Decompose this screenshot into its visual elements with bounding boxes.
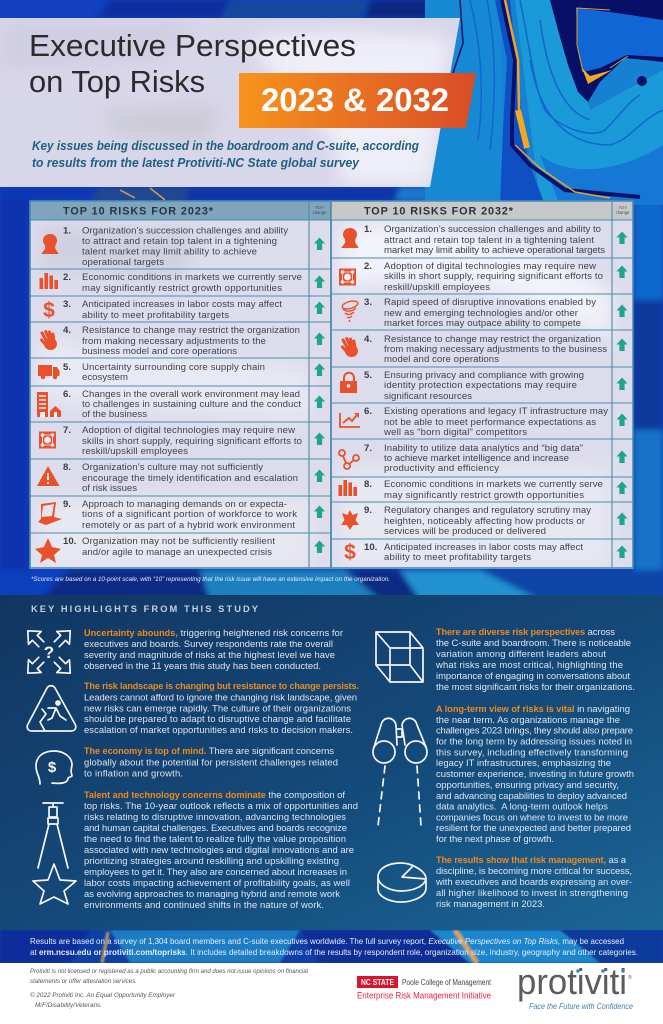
text: diverse perspectives bbox=[435, 627, 635, 693]
text: diverse perspectives: variation among different leaders about bbox=[436, 649, 606, 660]
text: long-term view: companies focus on where to invest to be more bbox=[436, 812, 628, 824]
risk 6: to challenges in sustaining culture and the conduct bbox=[82, 399, 301, 410]
highlight: economy bbox=[36, 746, 338, 784]
risk 10: 10. bbox=[63, 536, 76, 547]
risk 6 bbox=[340, 406, 628, 438]
heading: top 10 risks 2032: YOY bbox=[618, 205, 628, 210]
risk 2: 2. bbox=[364, 261, 372, 272]
icon: spotlight and star bbox=[33, 803, 76, 904]
risk 10: $ bbox=[344, 541, 356, 564]
text: talent and technology: prioritizing strategies around reskilling and upskilling existing bbox=[84, 856, 339, 867]
legal disclaimer: M/F/Disability/Veterans. bbox=[35, 1002, 102, 1009]
title panel bbox=[0, 18, 476, 187]
risk 4: 4. bbox=[63, 325, 71, 336]
risk 2: Economic conditions in markets we currently serve bbox=[82, 272, 302, 283]
panel: top 10 risks for 2023 bbox=[30, 201, 331, 568]
risk 1 bbox=[42, 226, 325, 268]
text: long-term view: for the next phase of growth. bbox=[436, 834, 554, 845]
text: economy: The economy is top of mind. There are significant concerns bbox=[84, 746, 334, 757]
risk 6: 6. bbox=[63, 389, 71, 400]
text: long-term view: data analytics. A long-term outlook helps bbox=[436, 802, 608, 812]
text: talent and technology: Talent and technology concerns dominate the composition of bbox=[84, 790, 345, 801]
risk 6: of the business bbox=[82, 409, 147, 420]
risk 2 bbox=[339, 261, 628, 293]
risk 9 bbox=[38, 499, 325, 531]
risk 2: may significantly restrict growth opportunities bbox=[82, 283, 282, 294]
footer bbox=[0, 961, 663, 1024]
icon: head with dollar bbox=[36, 751, 72, 784]
text: risk management bbox=[435, 855, 632, 910]
highlight: diverse perspectives bbox=[376, 627, 635, 693]
text: risk management: with executives and boards expressing an over- bbox=[435, 877, 632, 888]
risk 9: remotely or as part of a hybrid work environment bbox=[82, 520, 295, 531]
risk 6: 6. bbox=[364, 406, 372, 417]
risk 2: 2. bbox=[63, 272, 71, 283]
logo: protiviti: protiviti bbox=[517, 961, 627, 1002]
risk 4: from making necessary adjustments to the business bbox=[384, 344, 607, 355]
risk 1: Organization’s succession challenges and ability bbox=[82, 226, 288, 236]
marbled background: upper section bbox=[0, 0, 663, 600]
text: talent and technology: top risks. The 10-year outlook reflects a mix of opportunities and bbox=[84, 801, 358, 812]
text: diverse perspectives: There are diverse risk perspectives across bbox=[436, 627, 615, 638]
risk 2: skills in short supply, requiring significant efforts to bbox=[384, 271, 603, 282]
icon: wireframe cube bbox=[376, 632, 423, 682]
risk 5 bbox=[340, 370, 628, 402]
risk 8: 8. bbox=[63, 462, 71, 473]
heading: top 10 risks 2032 bbox=[331, 201, 633, 220]
risk 4: 4. bbox=[364, 334, 372, 345]
year badge bbox=[239, 73, 476, 128]
footnote: *Scores are based on a 10-point scale, with “10” representing that the risk issue will have an extensive impact on the organization. bbox=[31, 576, 390, 583]
text: economy bbox=[84, 746, 338, 780]
logo: NC State bbox=[357, 976, 492, 1000]
legal disclaimer: © 2022 Protiviti Inc. An Equal Opportunity Employer bbox=[30, 991, 176, 999]
icon: arrows and question mark: ? bbox=[44, 643, 54, 662]
logo: NC State: Poole College of Management bbox=[402, 978, 492, 987]
risk 6 bbox=[37, 389, 325, 420]
risk 2 bbox=[40, 272, 325, 294]
text: risk landscape: The risk landscape is changing but resistance to change persists. bbox=[84, 681, 359, 691]
legal disclaimer: statements or offer attestation services. bbox=[30, 978, 137, 985]
risk 4: Resistance to change may restrict the organization bbox=[384, 334, 601, 345]
icon: falling figure triangle bbox=[27, 686, 76, 731]
risk 1: 1. bbox=[364, 224, 372, 235]
risk 10 bbox=[344, 541, 628, 564]
risk 6: not be able to meet performance expectations as bbox=[384, 417, 596, 428]
risk 7: 7. bbox=[63, 425, 71, 436]
risk 6: well as “born digital” competitors bbox=[383, 427, 527, 438]
risk 5: significant resources bbox=[384, 391, 472, 402]
text: talent and technology: labor costs impacting achievement of profitability goals, as well bbox=[84, 878, 350, 889]
heading: top 10 risks 2023: YOY bbox=[315, 205, 325, 210]
title bbox=[29, 28, 356, 99]
text: risk landscape: escalation of market opportunities and risks to decision makers. bbox=[84, 725, 353, 736]
risk 1: market may limit ability to achieve operational targets bbox=[384, 245, 605, 256]
year badge: 2023 & 2032 bbox=[261, 82, 449, 118]
risk 7 bbox=[39, 425, 325, 457]
logo: NC State: NC STATE bbox=[361, 978, 395, 987]
risk 5 bbox=[38, 362, 325, 383]
risk 7: to achieve market intelligence and increase bbox=[384, 453, 569, 464]
text: risk landscape bbox=[84, 681, 359, 736]
panel: key highlights bbox=[0, 595, 663, 930]
risk 1: operational targets bbox=[82, 257, 164, 268]
risk 5: 5. bbox=[63, 362, 71, 373]
risk 7: Adoption of digital technologies may require new bbox=[82, 425, 295, 436]
risk 9: 9. bbox=[63, 499, 71, 510]
risk 8: Organization’s culture may not sufficiently bbox=[82, 462, 263, 473]
risk 3: Rapid speed of disruptive innovations enabled by bbox=[384, 297, 596, 308]
text: talent and technology: as evolving approaches to managing hybrid and remote work bbox=[84, 889, 340, 900]
risk 3: ability to meet profitability targets bbox=[82, 310, 229, 321]
logo: NC State: Enterprise Risk Management Initiative bbox=[357, 990, 491, 1000]
risk 9 bbox=[341, 505, 628, 537]
risk 9: heighten, noticeably affecting how products or bbox=[384, 516, 586, 527]
subtitle bbox=[32, 138, 419, 170]
title: Executive Perspectives bbox=[29, 28, 356, 63]
risk 7: productivity and efficiency bbox=[384, 463, 499, 474]
risk 4: model and core operations bbox=[384, 354, 499, 365]
text: uncertainty: severity and magnitude of risks at the highest level we have bbox=[84, 650, 335, 661]
text: long-term view: and advancing capabilities to deploy advanced bbox=[436, 791, 627, 802]
risk 5: Uncertainty surrounding core supply chain bbox=[82, 362, 265, 373]
risk 3 bbox=[43, 299, 325, 322]
text: talent and technology: employees to get it. They also are concerned about increases in bbox=[84, 867, 347, 878]
text: risk landscape: should be prepared to adapt to disruptive change and facilitate bbox=[84, 714, 351, 725]
icon: head with dollar: $ bbox=[48, 759, 57, 776]
risk 7: Inability to utilize data analytics and “big data” bbox=[384, 443, 583, 454]
risk 5: Ensuring privacy and compliance with growing bbox=[384, 370, 584, 381]
subtitle: Key issues being discussed in the boardroom and C-suite, according bbox=[32, 138, 419, 153]
risk 9: 9. bbox=[364, 505, 372, 516]
title: on Top Risks bbox=[29, 64, 205, 99]
heading: top 10 risks 2023 bbox=[30, 201, 331, 220]
text: risk management: all higher likelihood to invest in strengthening bbox=[436, 888, 628, 899]
highlight: talent and technology bbox=[33, 790, 358, 911]
heading: top 10 risks 2032: TOP 10 RISKS FOR 2032* bbox=[364, 206, 514, 218]
risk 7: 7. bbox=[364, 443, 372, 454]
highlight: uncertainty bbox=[21, 624, 343, 680]
risk 7: skills in short supply, requiring significant efforts to bbox=[82, 436, 302, 447]
risk 8 bbox=[338, 479, 628, 501]
legal disclaimer bbox=[30, 968, 309, 1009]
text: uncertainty: executives and boards. Survey respondents rate the overall bbox=[84, 639, 333, 650]
heading: top 10 risks 2023: change bbox=[313, 210, 327, 215]
risk 10 bbox=[35, 536, 325, 563]
risk 10: Organization may not be sufficiently resilient bbox=[82, 536, 275, 547]
section heading: KEY HIGHLIGHTS FROM THIS STUDY bbox=[31, 604, 259, 614]
logo: protiviti: Face the Future with Confidence bbox=[529, 1002, 634, 1011]
risk 8: 8. bbox=[364, 479, 372, 490]
risk 6: Changes in the overall work environment may lead bbox=[82, 389, 300, 400]
risk 9: services will be produced or delivered bbox=[384, 526, 546, 537]
highlight: risk landscape bbox=[27, 681, 359, 736]
logo: protiviti: ® bbox=[628, 974, 632, 981]
risk 8 bbox=[37, 462, 325, 494]
text: long-term view: legacy IT infrastructures, emphasizing the bbox=[436, 758, 611, 769]
text: uncertainty: Uncertainty abounds, triggering heightened risk concerns for bbox=[84, 628, 343, 639]
highlight: long-term view bbox=[373, 704, 634, 845]
risk 10: 10. bbox=[364, 542, 377, 553]
text: talent and technology: and human capital challenges. Executives and boards recognize bbox=[84, 823, 347, 834]
risk 3: 3. bbox=[364, 297, 372, 308]
risk 3: $ bbox=[43, 299, 55, 322]
subtitle: to results from the latest Protiviti-NC State global survey bbox=[32, 155, 360, 170]
risk 9: Regulatory changes and regulatory scrutiny may bbox=[384, 505, 591, 516]
risk 2: Adoption of digital technologies may require new bbox=[384, 261, 596, 272]
risk 4: from making necessary adjustments to the bbox=[82, 336, 266, 347]
icon: arrows and question mark bbox=[21, 624, 77, 680]
text: economy: to inflation and growth. bbox=[84, 768, 183, 780]
risk 10: ability to meet profitability targets bbox=[384, 552, 531, 563]
text: diverse perspectives: the most significant risks for their organizations. bbox=[436, 682, 635, 693]
heading: top 10 risks 2023: TOP 10 RISKS FOR 2023* bbox=[63, 206, 214, 218]
text: risk management: risk management in 2023. bbox=[436, 899, 545, 910]
text: long-term view: customer experience, investing in future growth bbox=[436, 769, 634, 780]
text: risk management: discipline, is becoming more critical for success, bbox=[436, 866, 632, 877]
risk 8: of risk issues bbox=[82, 483, 137, 494]
survey note strip bbox=[0, 930, 663, 963]
risk 9: tions of a significant portion of workforce to work bbox=[82, 509, 297, 520]
icon: pie chart bbox=[378, 863, 426, 902]
text: risk management: The results show that risk management, as a bbox=[436, 855, 627, 866]
risk 5: 5. bbox=[364, 370, 372, 381]
risk 5: ecosystem bbox=[82, 372, 128, 383]
risk 3 bbox=[341, 297, 628, 329]
text: economy: globally about the potential for persistent challenges related bbox=[84, 758, 338, 768]
risk 1 bbox=[342, 224, 628, 256]
text: diverse perspectives: the C-suite and boardroom. There is noticeable bbox=[436, 638, 631, 649]
risk 4: Resistance to change may restrict the organization bbox=[82, 325, 300, 336]
risk 3: Anticipated increases in labor costs may affect bbox=[82, 299, 282, 310]
risk 1: talent market may limit ability to achieve bbox=[82, 246, 257, 258]
survey note strip: at erm.ncsu.edu or protiviti.com/toprisks. It includes detailed breakdowns of the results by respondent role, organization size, industry, geography and other categories. bbox=[30, 947, 638, 957]
text: long-term view: for the long term by addressing issues noted in bbox=[436, 736, 632, 748]
text: diverse perspectives: importance of engaging in conversations about bbox=[436, 671, 630, 682]
text: long-term view bbox=[436, 704, 634, 845]
risk 1: Organization’s succession challenges and ability to bbox=[384, 224, 601, 235]
text: risk landscape: new risks can emerge rapidly. The culture of their organizations bbox=[84, 704, 351, 714]
risk 5: identity protection expectations may require bbox=[384, 380, 577, 391]
risk 10: Anticipated increases in labor costs may affect bbox=[384, 542, 583, 553]
risk 6: Existing operations and legacy IT infrastructure may bbox=[384, 406, 608, 417]
table backing bbox=[30, 201, 633, 569]
risk 9: Approach to managing demands on or expecta- bbox=[82, 499, 287, 510]
risk 8: encourage the timely identification and escalation bbox=[82, 473, 298, 484]
text: long-term view: resilient for the unexpected and better prepared bbox=[436, 823, 631, 834]
risk 1: attract and retain top talent in a tightening talent bbox=[384, 235, 594, 246]
highlight: risk management bbox=[378, 855, 632, 910]
panel: top 10 risks for 2032 bbox=[331, 201, 633, 568]
risk 2: reskill/upskill employees bbox=[384, 282, 490, 293]
text: uncertainty bbox=[84, 628, 343, 672]
risk 3: 3. bbox=[63, 299, 71, 310]
risk 1: to attract and retain top talent in a tightening bbox=[82, 236, 277, 247]
text: talent and technology: the need to find the talent to realize fully the value proposition bbox=[84, 834, 346, 845]
text: diverse perspectives: what risks are most critical, highlighting the bbox=[435, 660, 623, 671]
risk 8: Economic conditions in markets we currently serve bbox=[384, 479, 603, 490]
legal disclaimer: Protiviti is not licensed or registered as a public accounting firm and does not issue opinions on financial bbox=[30, 968, 309, 975]
survey note strip: Results are based on a survey of 1,304 board members and C-suite executives worldwide. The full survey report, Executive Perspectives on Top Risks, may be accessed bbox=[30, 936, 624, 946]
text: long-term view: the near term. As organizations manage the bbox=[436, 715, 620, 726]
risk 10: and/or agile to manage an unexpected crisis bbox=[82, 547, 272, 558]
text: talent and technology bbox=[84, 790, 358, 911]
risk 4: business model and core operations bbox=[82, 346, 237, 357]
text: long-term view: opportunities, ensuring privacy and security, bbox=[436, 780, 619, 791]
text: uncertainty: observed in the 11 years this study has been conducted. bbox=[84, 661, 321, 672]
text: talent and technology: environments and continued shifts in the nature of work. bbox=[84, 900, 324, 911]
risk 3: market forces may outpace ability to compete bbox=[384, 318, 581, 329]
risk 1: 1. bbox=[63, 226, 71, 236]
risk 4 bbox=[342, 334, 628, 365]
text: talent and technology: risks relating to disruptive innovation, advancing technologies bbox=[84, 812, 346, 823]
heading: top 10 risks 2032: change bbox=[616, 210, 630, 215]
text: long-term view: challenges 2023 brings, they should also prepare bbox=[436, 726, 633, 736]
text: long-term view: A long-term view of risks is vital in navigating bbox=[436, 704, 630, 715]
risk 7 bbox=[339, 443, 628, 474]
risk 8: may significantly restrict growth opportunities bbox=[384, 490, 584, 501]
risk 3: new and emerging technologies and/or other bbox=[384, 308, 579, 319]
risk 7: reskill/upskill employees bbox=[82, 446, 188, 457]
text: long-term view: this survey, including effectively transforming bbox=[436, 748, 628, 758]
icon: binoculars bbox=[373, 718, 427, 826]
text: talent and technology: associated with new technologies and digital innovations and are bbox=[84, 845, 354, 856]
text: risk landscape: Leaders cannot afford to ignore the changing risk landscape, given bbox=[84, 692, 357, 704]
risk 4 bbox=[42, 325, 325, 357]
